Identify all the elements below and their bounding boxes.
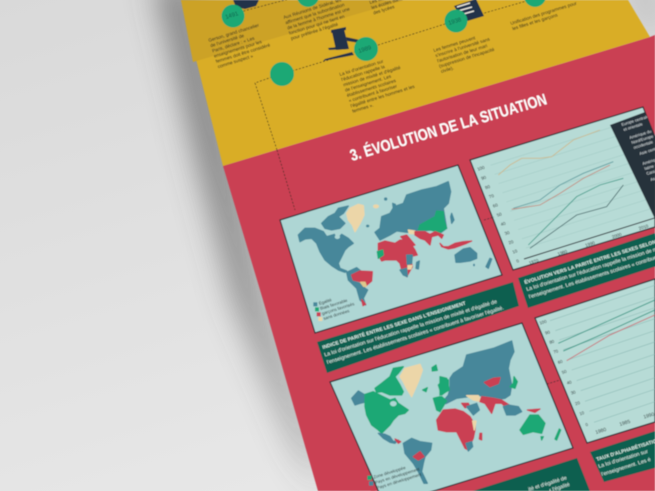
chart 1 grid and axis: 1980 [557, 249, 568, 256]
timeline circle 1989: 1989 [358, 45, 373, 55]
caption: literacy: l'enseignement. Les é [601, 457, 652, 478]
chart 2 axis labels: 100 [539, 319, 548, 326]
map 2 Eurasia, Africa, Oceania [435, 341, 561, 451]
text: 1938: (suppression de l'incapacité [438, 47, 495, 69]
map 1 legend: garçons favorisés [321, 301, 355, 316]
caption: parity: La loi d'orientation sur l'éducation rappelle la mission de mixité et d'égalité de [324, 299, 498, 358]
text: unification: les filles et les garçons [512, 12, 559, 31]
chart 1 legend panel: Europe centrale [621, 114, 650, 127]
chart 1 legend panel: Amérique du [629, 129, 652, 140]
text: 1491: de l'université de [210, 33, 245, 48]
text: 1989: La loi d'orientation sur [339, 59, 384, 77]
icon: book top left [233, 0, 259, 9]
map 1 legend: Égalité [318, 297, 333, 306]
chart 2 data lines [558, 300, 655, 361]
map 1 legend [313, 297, 355, 321]
text: 1989: femmes ». [352, 103, 374, 114]
dashed connector in red [277, 150, 295, 210]
timeline circle 1938 [444, 10, 468, 32]
text: 1938: l'autorisation de leur mari [436, 43, 488, 63]
panel: line chart regions [470, 105, 655, 270]
caption: parity progress [518, 227, 655, 308]
text: réunions: de la femme à l'homme est une [286, 6, 351, 30]
heading: 3. ÉVOLUTION DE LA SITUATION [347, 90, 549, 165]
text: lycées: des lycées [372, 4, 396, 15]
map 2 Americas and Greenland [352, 364, 448, 483]
chart 2 axis labels: 1980 [595, 427, 607, 436]
icon: gavel [323, 27, 360, 61]
text: 1989: de l'enseignement. Les [344, 74, 392, 93]
chart 1 grid and axis: 0 [515, 258, 520, 264]
text: 1491: enseignements pour les [213, 39, 263, 59]
chart 1 grid and axis: 60 [492, 202, 499, 208]
chart 1 grid and axis: 90 [480, 175, 487, 181]
panel: red section [223, 35, 655, 491]
chart 2 axis labels: 30 [570, 389, 577, 396]
text: réunions: fonction pour qui ne tient en [288, 14, 346, 36]
text: 1491: Gerson, grand chancelier [208, 22, 260, 43]
chart 2 axis labels: 50 [561, 369, 568, 375]
chart 1 grid and axis: 50 [496, 211, 503, 218]
text: 1938: Les femmes peuvent [433, 35, 477, 53]
chart 2 axis labels [539, 319, 655, 436]
chart 2 grid [550, 285, 655, 422]
map 1 Americas and Greenland [298, 197, 387, 306]
panel: yellow timeline section [181, 0, 650, 210]
timeline dashed connector [240, 0, 530, 210]
timeline circle 1491 [222, 4, 244, 28]
chart 1 grid and axis: 10 [511, 248, 519, 254]
caption: literacy [590, 431, 655, 482]
map 2 legend: Zone développée [373, 465, 407, 480]
chart 1 grid and axis: 2000 [611, 232, 623, 239]
chart 2 axis labels: 20 [574, 400, 581, 406]
chart 2 axis labels: 70 [553, 348, 559, 355]
chart 1 grid and axis: 1990 [584, 240, 596, 248]
chart 1 grid and axis: 1970 [528, 258, 540, 265]
text: 1938: civile). [440, 65, 454, 74]
chart 1 grid and axis: 40 [500, 221, 507, 227]
text: 1989: l'égalité entre les hommes et les [350, 84, 416, 109]
text: 1989: l'éducation rappelle la [341, 64, 386, 82]
timeline circle top [297, 0, 319, 7]
caption: parity: l'enseignement. Les établissements scolaires « contribuent à favoriser l'égalité. [326, 305, 505, 366]
chart 2 axis labels: 1985 [619, 419, 631, 428]
panel: map development [330, 323, 573, 491]
timeline circle top right [524, 0, 546, 7]
icon: document stack [454, 0, 484, 22]
chart 1 legend panel: Nord/Europe [631, 133, 655, 145]
chart 1 grid and axis [477, 136, 655, 265]
map 1 legend: sans données [323, 308, 350, 321]
chart 2 axis labels: 0 [585, 422, 589, 427]
chart 1 legend panel: occidentale [633, 139, 654, 150]
timeline circle 1491: 1491 [225, 11, 240, 21]
chart 2 axis labels: 60 [557, 359, 564, 365]
chart 2 axis labels: 80 [549, 339, 555, 345]
text: 1989: mission de mixité et d'égalité [342, 65, 402, 87]
chart 1 data lines [498, 130, 623, 248]
chart 1 legend panel [610, 112, 655, 230]
chart 1 grid and axis: 20 [508, 239, 515, 245]
map 2 legend: Pays en développement [376, 472, 423, 490]
timeline circle 1938: 1938 [448, 17, 463, 27]
text: réunions: affirment que la subordination [285, 2, 346, 25]
caption: parity: INDICE DE PARITÉ ENTRE LES SEXE DANS L'ENSEIGNEMENT [321, 299, 467, 351]
text: unification: Unification des programmes pour [510, 1, 578, 26]
chart 1 legend panel: et orientale [623, 121, 644, 132]
caption: literacy: La loi d'orientation sur [598, 449, 649, 470]
text: 1989: « contribuent à favoriser [348, 83, 398, 103]
chart 2 axis labels: 10 [579, 410, 585, 416]
text: 1491: comme suspect » [217, 54, 254, 69]
text: 1491: Paris, déclare : « Les [211, 35, 256, 53]
chart 2 axis labels: 40 [566, 379, 573, 386]
text: 1989: établissements scolaires [346, 78, 397, 98]
chart 1 grid and axis: 30 [504, 230, 511, 236]
chart 1 grid and axis: 100 [476, 165, 486, 172]
timeline circle blank [270, 62, 294, 86]
timeline circle 1989 [354, 37, 378, 61]
panel: map parity [280, 165, 502, 333]
map 2 legend: Pays en développement [374, 466, 421, 485]
chart 1 grid and axis: 70 [488, 193, 495, 199]
caption: parity [317, 282, 519, 373]
map 1 Eurasia, Africa, Oceania [375, 182, 492, 277]
chart 2 axis labels: 1990 [643, 412, 655, 421]
text: 1938: s'inscrire à l'université sans [435, 36, 491, 58]
text: réunions: pour préférée à l'égalité [290, 22, 339, 41]
chart 2 axis labels: 90 [544, 329, 551, 336]
panel: line chart literacy [535, 279, 655, 443]
caption: development [473, 458, 590, 491]
chart 1 grid and axis: 2010 [638, 223, 650, 231]
connector dashes between panels [484, 217, 560, 384]
map 1 legend: Biais favorable [319, 298, 349, 311]
paper shadow [155, 0, 655, 491]
text: 1491: femmes doit être considéré [215, 42, 271, 64]
map 2 legend [367, 465, 423, 491]
chart 1 grid and axis: 80 [484, 184, 491, 190]
poster sheet [181, 0, 655, 491]
